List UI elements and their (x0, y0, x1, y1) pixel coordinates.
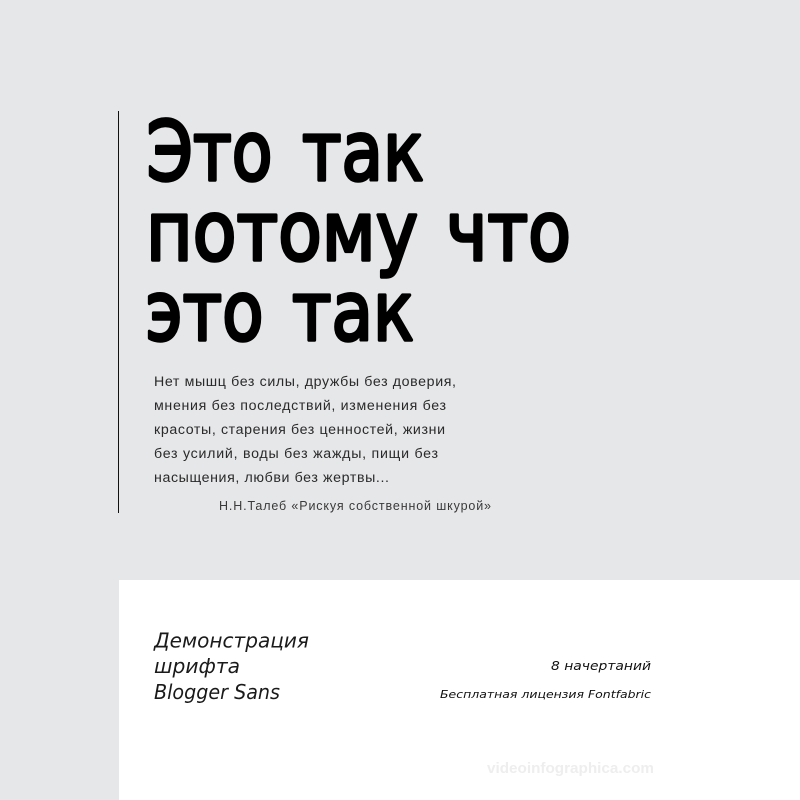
quote attribution: Н.Н.Талеб «Рискуя собственной шкурой» (219, 499, 491, 513)
quote text: насыщения, любви без жертвы... (154, 470, 389, 486)
font styles count: 8 начертаний (551, 658, 651, 673)
vertical rule (118, 111, 119, 513)
title: это (146, 265, 264, 360)
title: потому (146, 185, 418, 280)
quote text: мнения без последствий, изменения без (154, 398, 446, 414)
white footer panel (119, 580, 800, 800)
watermark: videoinfographica.com (487, 760, 654, 777)
footer heading (153, 628, 309, 704)
quote text: красоты, старения без ценностей, жизни (154, 422, 445, 438)
footer heading: шрифта (154, 654, 240, 678)
quote text (154, 374, 456, 486)
title: Это (146, 105, 272, 200)
footer heading: Демонстрация (153, 628, 309, 652)
quote text: без усилий, воды без жажды, пищи без (154, 446, 438, 462)
title: так (292, 265, 414, 360)
title (146, 105, 571, 360)
title: что (446, 185, 571, 280)
title: так (302, 105, 424, 200)
quote text: Нет мышц без силы, дружбы без доверия, (154, 374, 456, 390)
footer heading: Blogger Sans (154, 680, 280, 704)
license note: Бесплатная лицензия Fontfabric (440, 688, 651, 701)
